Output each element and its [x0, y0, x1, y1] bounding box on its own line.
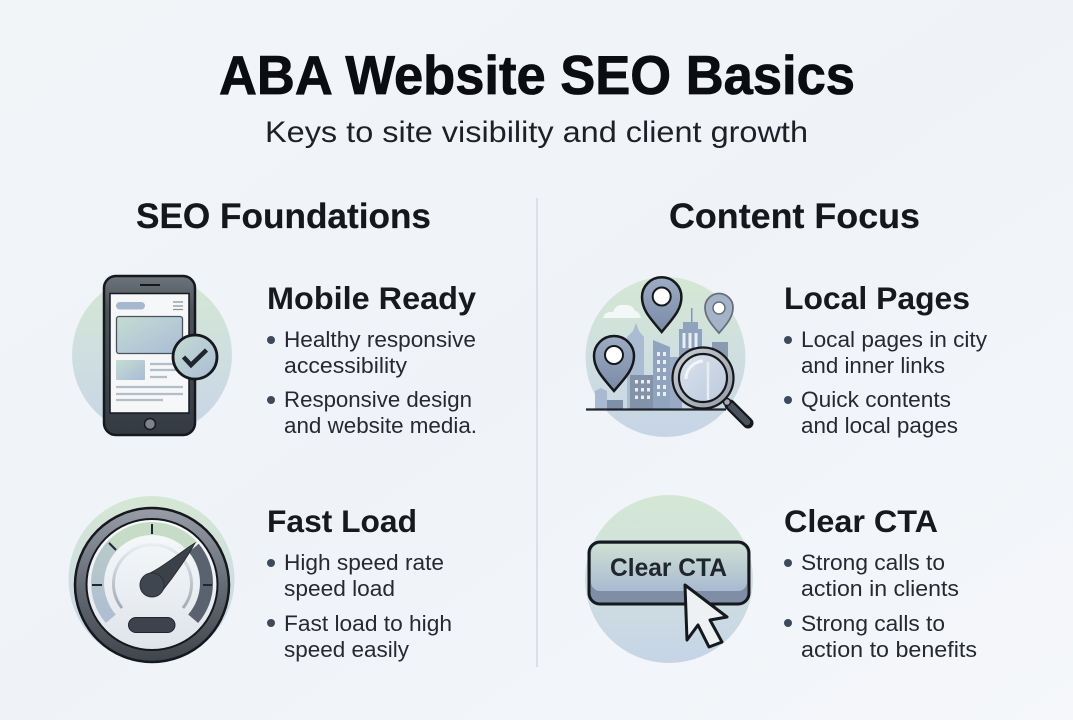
text block: Fast Load: Fast load to high	[284, 611, 452, 636]
icon: call-to-action button with cursor	[585, 495, 753, 663]
text block: Fast Load: Fast Load	[267, 503, 417, 539]
icon: call-to-action button with cursor: Clear CTA	[610, 554, 727, 582]
text block: Local Pages: Local Pages	[784, 280, 970, 316]
text block: Mobile Ready: and website media.	[284, 413, 477, 438]
title: ABA Website SEO Basics	[219, 44, 855, 106]
text block: Fast Load: High speed rate	[284, 550, 444, 575]
text block: Mobile Ready: Responsive design	[284, 387, 472, 412]
heading: Content Focus: Content Focus	[669, 197, 920, 236]
text block: Fast Load: speed load	[284, 576, 395, 601]
icon: speedometer gauge	[68, 496, 234, 662]
text block: Local Pages: Quick contents	[801, 387, 951, 412]
subtitle: Keys to site visibility and client growth	[265, 116, 808, 149]
text block: Clear CTA: Strong calls to	[801, 611, 945, 636]
icon: mobile phone with check badge	[72, 275, 232, 435]
text block: Clear CTA: action in clients	[801, 576, 959, 601]
text block: Clear CTA: Clear CTA	[784, 503, 938, 539]
text block: Clear CTA	[784, 503, 977, 662]
text block: Local Pages: and inner links	[801, 353, 945, 378]
text block: Mobile Ready: accessibility	[284, 353, 407, 378]
text block: Fast Load	[267, 503, 452, 662]
heading: SEO Foundations: SEO Foundations	[136, 197, 431, 236]
text block: Local Pages	[784, 280, 987, 438]
text block: Fast Load: speed easily	[284, 637, 409, 662]
text block: Clear CTA: Strong calls to	[801, 550, 945, 575]
icon: city with map pins and magnifier	[586, 277, 748, 437]
text block: Local Pages: Local pages in city	[801, 327, 987, 352]
text block: Mobile Ready: Mobile Ready	[267, 280, 476, 316]
text block: Mobile Ready	[267, 280, 477, 438]
text block: Local Pages: and local pages	[801, 413, 958, 438]
text block: Clear CTA: action to benefits	[801, 637, 977, 662]
text block: Mobile Ready: Healthy responsive	[284, 327, 476, 352]
